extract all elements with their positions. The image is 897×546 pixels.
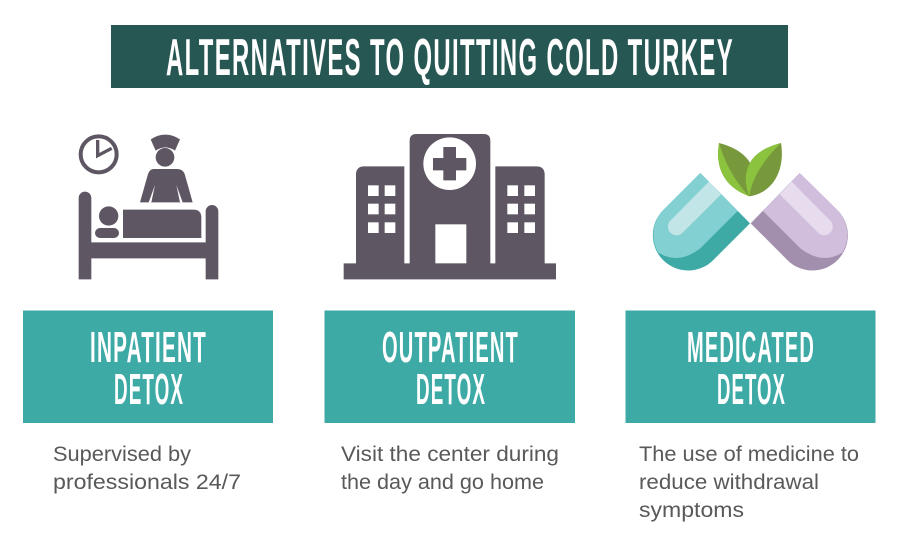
text: inpatient description: Supervised by <box>53 443 192 466</box>
text: medicated description: symptoms <box>639 499 744 522</box>
panel: outpatient detox <box>324 310 575 423</box>
text: outpatient description <box>341 443 559 494</box>
panel: medicated detox: DETOX <box>717 365 786 414</box>
panel: medicated detox <box>626 310 876 423</box>
teal capsule <box>653 173 750 271</box>
text: outpatient description: Visit the center during <box>341 443 559 466</box>
icon: hospital building <box>344 134 556 279</box>
panel: inpatient detox <box>23 310 273 423</box>
purple capsule <box>751 173 848 271</box>
green leaves <box>718 143 782 196</box>
text: medicated description: The use of medicine to <box>639 443 859 466</box>
icon: nurse, patient in bed and clock <box>79 135 218 279</box>
text: medicated description <box>639 443 859 522</box>
title banner <box>111 25 788 88</box>
text: inpatient description <box>53 443 241 494</box>
text: inpatient description: professionals 24/7 <box>53 471 241 494</box>
panel: inpatient detox: DETOX <box>114 365 184 414</box>
text: outpatient description: the day and go home <box>341 471 544 494</box>
text: medicated description: reduce withdrawal <box>639 471 819 494</box>
panel: outpatient detox: OUTPATIENT <box>382 323 519 372</box>
icon: capsules with leaves <box>653 143 848 271</box>
panel: inpatient detox: INPATIENT <box>90 323 207 372</box>
panel: outpatient detox: DETOX <box>416 365 486 414</box>
